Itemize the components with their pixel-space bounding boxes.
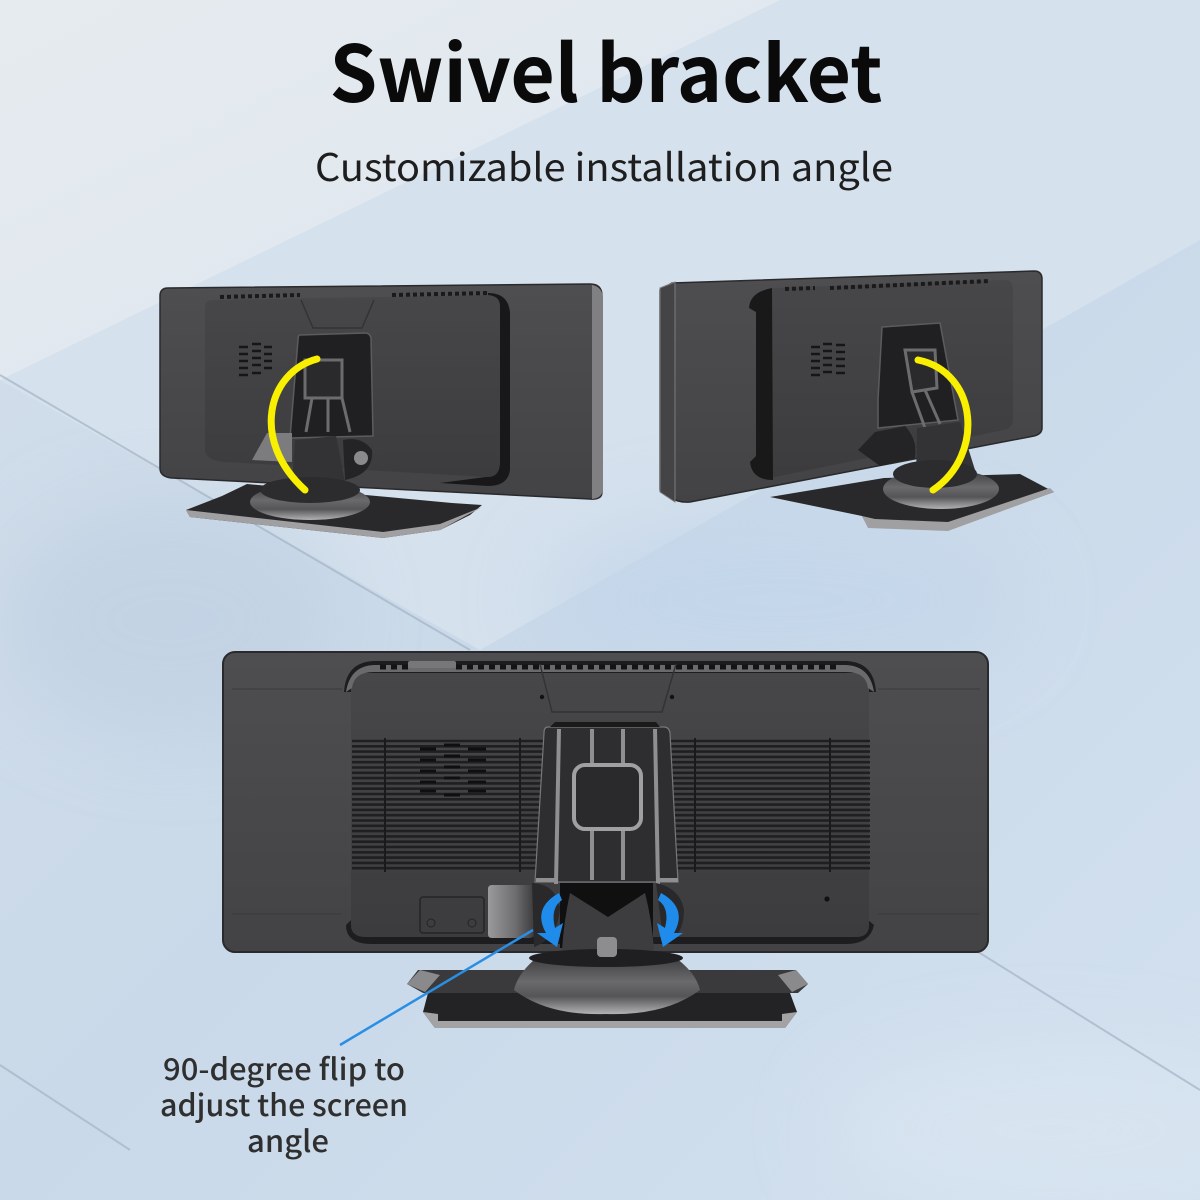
- left base plate: [186, 484, 482, 538]
- product: left view of display with swivel bracket: [160, 284, 603, 538]
- product: right view of display with swivel bracket: [660, 271, 1054, 531]
- left screen body: [160, 284, 602, 499]
- product: large rear view of display: [223, 652, 988, 1028]
- right pivot knob: [656, 883, 684, 946]
- left bracket plate: [290, 333, 373, 438]
- right vents: [785, 281, 990, 289]
- right suction cup: [883, 469, 999, 509]
- right rear housing: [772, 280, 1013, 477]
- base plate: [407, 970, 808, 993]
- right yellow arc: [918, 360, 968, 490]
- right base plate: [770, 474, 1054, 530]
- ribbed vent area: [352, 738, 870, 872]
- mounting dots: [540, 695, 544, 699]
- main screen: [223, 652, 988, 952]
- left yellow arc: [271, 359, 317, 490]
- callout text: adjust the screen: [160, 1081, 408, 1125]
- left pivot knob: [488, 885, 533, 938]
- subtitle: Customizable installation angle: [315, 137, 893, 192]
- access panel: [420, 897, 484, 933]
- right hinge: [916, 422, 975, 482]
- right bracket plate: [878, 323, 958, 428]
- mount notch: [540, 664, 676, 712]
- left suction cup: [250, 484, 370, 520]
- title: Swivel bracket: [330, 13, 882, 125]
- suction cup: [514, 955, 700, 1014]
- callout leader line: [340, 930, 533, 1045]
- bracket frame: [536, 729, 678, 884]
- blue flip arrow left: [537, 893, 563, 947]
- callout text: 90-degree flip to: [163, 1045, 405, 1089]
- dark rim at housing corners: [344, 661, 876, 944]
- bracket plate: [535, 727, 678, 882]
- top silver ledge: [346, 665, 874, 692]
- rear housing: [351, 673, 869, 937]
- left hinge: [292, 436, 345, 484]
- left mount notch: [301, 300, 374, 328]
- bolt stud: [597, 937, 617, 957]
- callout text: angle: [247, 1117, 329, 1161]
- left rear housing: [205, 295, 500, 477]
- hinge block: [560, 883, 653, 948]
- left vents: [220, 293, 490, 297]
- top vents: [380, 664, 840, 670]
- right screen body: [660, 271, 1042, 502]
- blue flip arrow right: [657, 893, 683, 947]
